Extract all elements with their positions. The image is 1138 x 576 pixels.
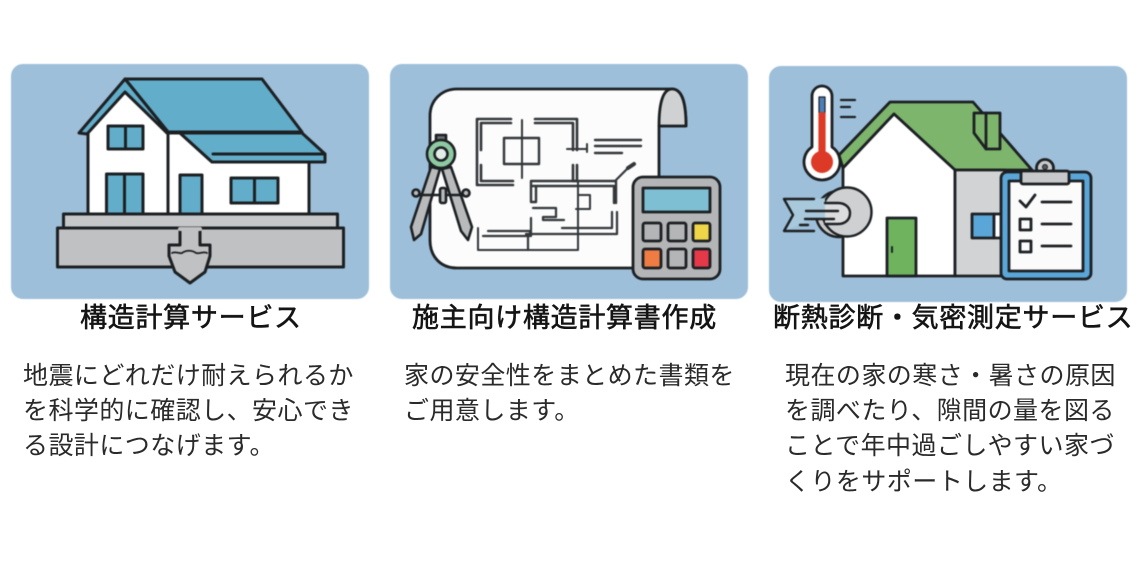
text block: insulation and airtightness: を調べたり、隙間の量を図る (785, 397, 1115, 425)
panel: insulation diagnosis illustration (769, 66, 1127, 302)
main roof (125, 79, 302, 132)
walls (88, 92, 168, 214)
heading: structural calculation: 構造計算サービス (80, 303, 302, 333)
text block: insulation and airtightness: ことで年中過ごしやすい家づ (785, 432, 1115, 460)
text block: structural calculation (23, 362, 354, 460)
icon: blueprint sheet (430, 89, 686, 268)
text block: insulation and airtightness: くりをサポートします。 (785, 468, 1062, 496)
text block: insulation and airtightness (785, 362, 1116, 496)
lower roof (180, 133, 325, 162)
upper window (108, 126, 143, 149)
text block: structural calculation: る設計につなげます。 (23, 432, 275, 460)
patio door (106, 174, 143, 214)
icon: compass (411, 135, 472, 240)
icon: house with foundation (58, 79, 344, 283)
panel: structural calculation illustration (11, 64, 369, 299)
text block: insulation and airtightness: 現在の家の寒さ・暑さの原因 (785, 362, 1116, 390)
entry door (180, 175, 202, 214)
left gable eave (79, 79, 168, 134)
side window (231, 178, 278, 203)
text block: client documents: 家の安全性をまとめた書類を (404, 362, 735, 390)
icon: green roof house (839, 102, 1032, 276)
heading: client documents: 施主向け構造計算書作成 (412, 303, 717, 333)
icon: clipboard checklist (1001, 160, 1091, 279)
icon: calculator (633, 177, 720, 279)
floor plan (477, 119, 641, 250)
door (887, 218, 916, 276)
text block: client documents (404, 362, 735, 425)
icon: thermometer (804, 86, 855, 180)
icon: air leak measurement (784, 188, 872, 237)
foundation slab (64, 214, 338, 228)
panel: blueprint illustration (390, 64, 748, 299)
chimney (974, 113, 1000, 149)
text block: client documents: ご用意します。 (404, 397, 580, 425)
text block: structural calculation: を科学的に確認し、安心でき (23, 397, 354, 425)
heading: insulation and airtightness: 断熱診断・気密測定サービス (773, 303, 1133, 333)
text block: structural calculation: 地震にどれだけ耐えられるか (23, 362, 354, 390)
window (972, 214, 994, 238)
